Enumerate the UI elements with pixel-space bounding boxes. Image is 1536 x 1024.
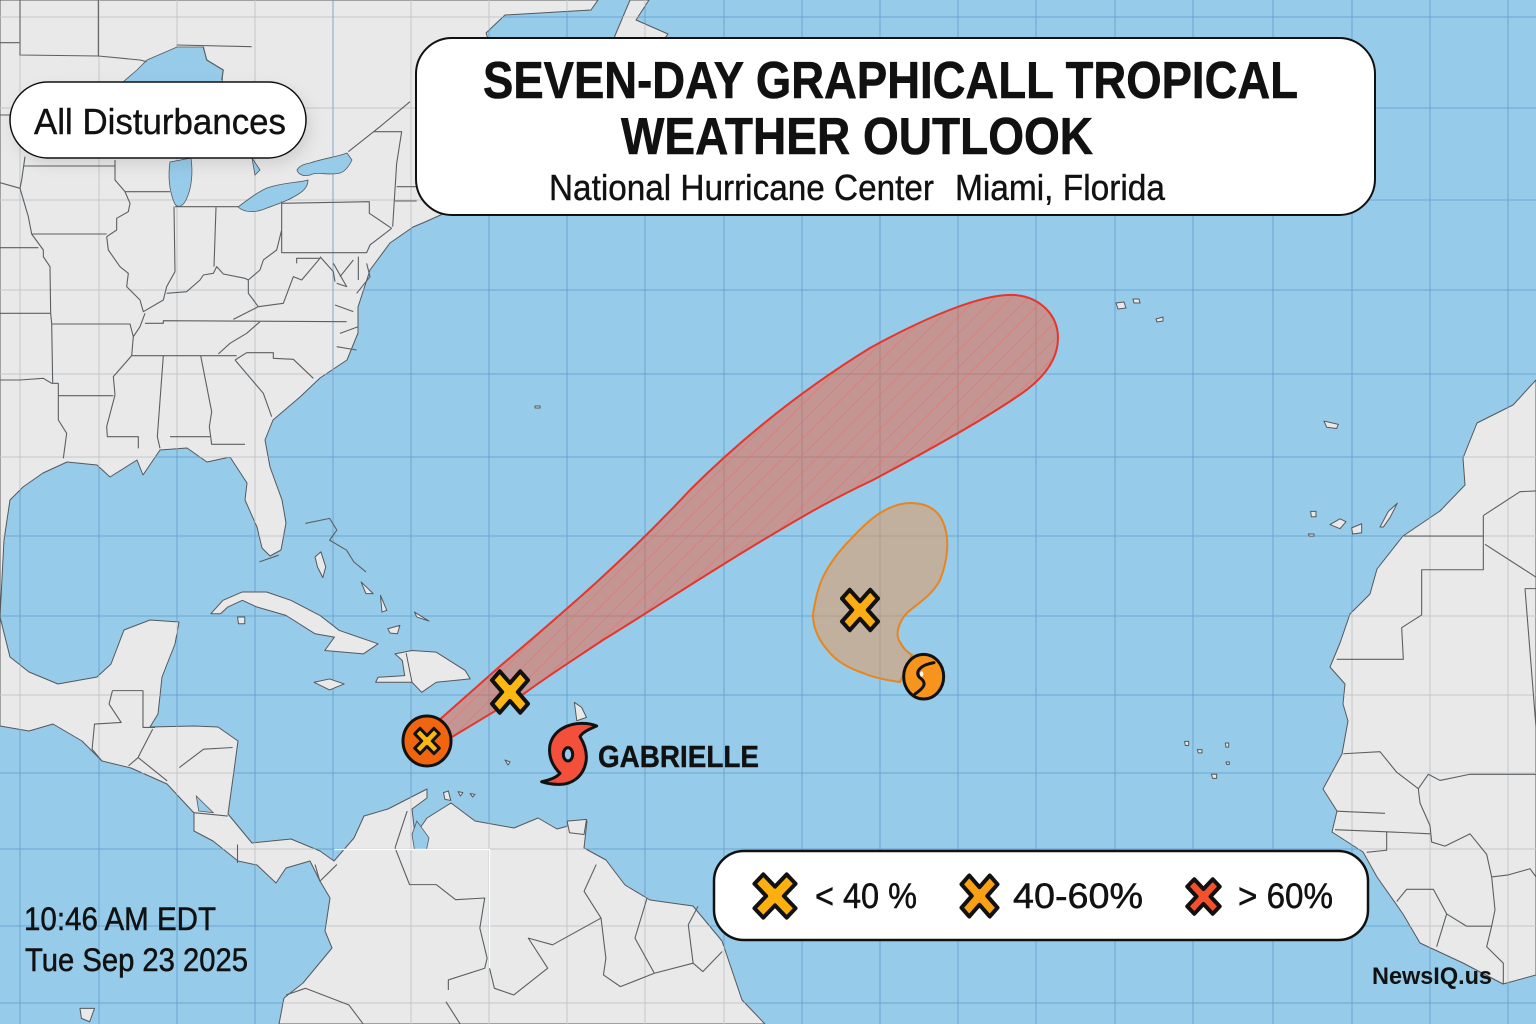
icon: small storm circle [904,654,944,699]
marker: orange x in orange area [832,578,888,642]
red development area [437,295,1058,737]
timestamp: 10:46 AM EDT [24,901,216,937]
marker: orange circle with x [403,716,451,766]
legend icon: 40 to 60 percent [951,864,1008,928]
african borders and atlantic islands [1185,421,1536,984]
icon: hurricane gabrielle [542,723,597,784]
atlantic islands [505,299,1163,765]
great lakes [123,47,352,212]
orange development area [813,503,947,682]
US state borders [0,0,417,458]
marker: yellow x in red area [482,659,538,725]
caribbean islands and central and south american borders [80,518,722,1024]
label: gabrielle: GABRIELLE [598,739,759,774]
legend label: over 60 percent: > 60% [1238,877,1333,916]
credit: newsiq: NewsIQ.us [1372,963,1492,990]
subtitle: location: Miami, Florida [955,167,1166,208]
pill: all disturbances [10,82,306,158]
subtitle: center: National Hurricane Center [549,167,934,208]
islands [1185,421,1397,778]
icon: cuba [211,592,378,654]
blue meridian over land [332,0,334,400]
bahamas and small islands [80,552,586,1022]
borders [1335,491,1536,984]
panel: title [416,38,1375,215]
legend panel [714,851,1368,940]
legend label: 40 to 60 percent: 40-60% [1013,877,1143,916]
title line two: WEATHER OUTLOOK [621,108,1093,166]
borders [92,691,722,1024]
bahamas chain [259,518,366,572]
legend icon: under 40 percent [743,862,807,930]
legend icon: over 60 percent [1178,869,1229,924]
timestamp [24,901,248,978]
title line one: SEVEN-DAY GRAPHICALL TROPICAL [483,52,1298,110]
timestamp: Tue Sep 23 2025 [25,942,248,978]
pill: all disturbances: All Disturbances [34,101,286,142]
lake maracaibo [412,821,429,850]
icon: jamaica [314,679,344,690]
icon: hispaniola [376,651,470,692]
lake nicaragua [196,796,213,813]
legend label: under 40 percent: < 40 % [815,877,917,916]
